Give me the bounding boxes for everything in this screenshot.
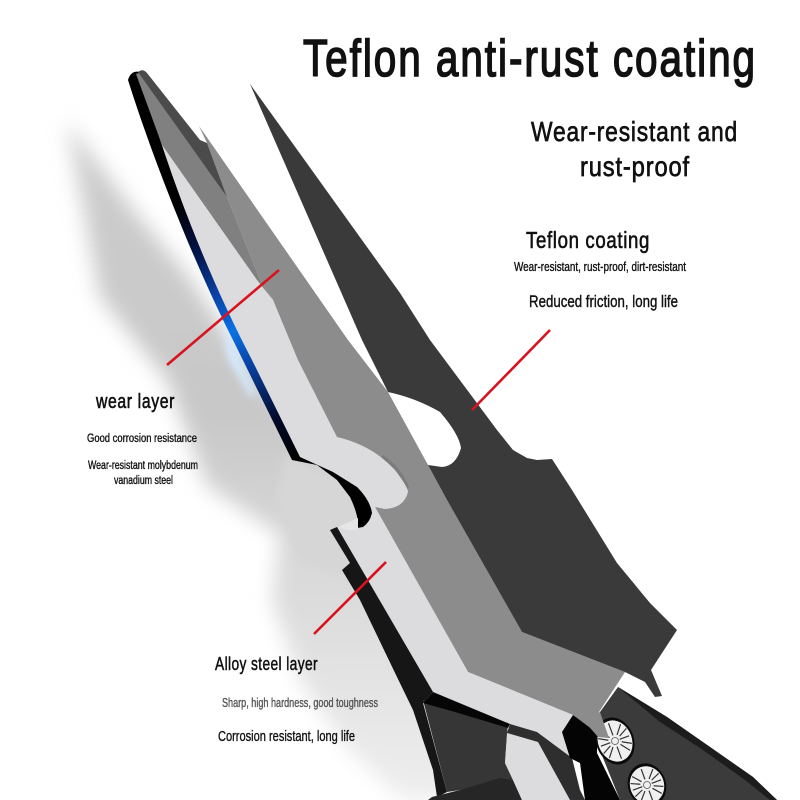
plier handle and joint [330, 527, 777, 800]
text block: alloy steel layer: Alloy steel layer [215, 654, 318, 674]
text block: wear layer: Wear-resistant molybdenum [88, 460, 198, 472]
text block: Teflon coating [514, 227, 686, 311]
handle: lower light arm [505, 733, 570, 800]
handle: grey grip [423, 700, 513, 792]
text block: alloy steel layer: Sharp, high hardness, good toughness [222, 696, 378, 710]
layer: blade tip wear surface [136, 70, 273, 300]
subtitle: Wear-resistant and [531, 116, 738, 147]
blue glow on cutting edge [222, 322, 256, 396]
text block: Teflon coating: Reduced friction, long life [529, 293, 678, 311]
red pointer: alloy steel layer [314, 562, 386, 634]
handle: right arm [597, 687, 777, 800]
shadow under curved edge [275, 455, 365, 580]
text block: Teflon coating: Wear-resistant, rust-proof, dirt-resistant [514, 260, 686, 274]
text block: wear layer: vanadium steel [114, 475, 173, 487]
icon: rivet lower [622, 758, 672, 800]
red pointer: Teflon coating [472, 330, 550, 410]
layer: black and blue wear edge [128, 72, 372, 530]
blurred drop shadow [67, 122, 480, 800]
red pointer: wear layer [167, 270, 279, 365]
handle: black top band [423, 692, 510, 728]
text block: wear layer [87, 391, 198, 487]
subtitle: rust-proof [580, 151, 690, 182]
layer: middle grey coating [199, 126, 625, 738]
layer: alloy steel base [162, 145, 573, 758]
handle: left dark strips [330, 527, 447, 797]
subtitle [531, 116, 738, 182]
layer: dark Teflon coating [250, 84, 677, 697]
handle: bottom cap [428, 778, 522, 800]
handle: lower dark arm [507, 724, 585, 800]
text block: Teflon coating: Teflon coating [526, 227, 650, 253]
text block: wear layer: wear layer [95, 391, 175, 413]
text block: alloy steel layer: Corrosion resistant, long life [218, 728, 355, 745]
handle: black centre [562, 715, 620, 800]
grey coating tip over rivet [585, 712, 609, 738]
icon: rivet upper [589, 712, 641, 770]
pale cap under curved edge [338, 518, 358, 530]
text block: alloy steel layer [215, 654, 378, 745]
darker sliver behind lobe [375, 455, 409, 500]
text block: wear layer: Good corrosion resistance [87, 433, 197, 445]
